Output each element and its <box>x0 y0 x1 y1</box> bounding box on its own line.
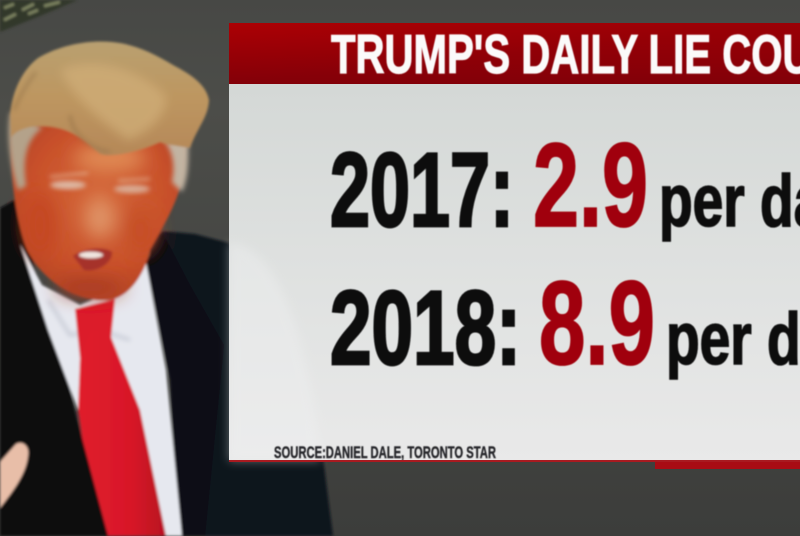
mouth <box>73 249 112 271</box>
raised thumb <box>0 443 28 508</box>
row 2018 label: 2018: <box>330 270 521 387</box>
ghost of coat showing through panel <box>229 243 320 461</box>
hair highlight <box>60 64 166 140</box>
source credit: SOURCE:DANIEL DALE, TORONTO STAR <box>274 444 496 462</box>
white shirt <box>20 244 182 536</box>
row 2018 value: 8.9 <box>539 257 655 390</box>
collar shadow <box>48 300 130 340</box>
panel body <box>229 84 800 461</box>
left side of black coat front <box>0 310 108 536</box>
row 2017 value: 2.9 <box>533 119 648 252</box>
red tie <box>75 299 166 536</box>
left eye <box>50 181 86 189</box>
hair dark strands <box>14 72 110 152</box>
gray side hair right <box>164 120 190 192</box>
bottom red rule <box>229 460 800 462</box>
right eye <box>114 185 150 193</box>
bottom red accent bar <box>655 462 800 469</box>
eyebrows <box>50 173 150 181</box>
row 2017 label: 2017: <box>330 132 514 249</box>
background: hedge in top-left corner <box>0 0 78 32</box>
panel: lie count graphic <box>229 23 800 469</box>
right side of dark navy coat <box>150 231 333 536</box>
header bar shading <box>229 23 800 84</box>
face <box>10 113 188 300</box>
photo: speaking man in dark coat and red tie <box>0 42 333 536</box>
facial shading and highlights <box>24 144 156 296</box>
header bar <box>229 23 800 84</box>
left side of black coat behind neck <box>0 198 100 536</box>
right coat lapel <box>146 233 224 536</box>
gray side hair left <box>8 112 42 190</box>
hair <box>10 42 209 155</box>
